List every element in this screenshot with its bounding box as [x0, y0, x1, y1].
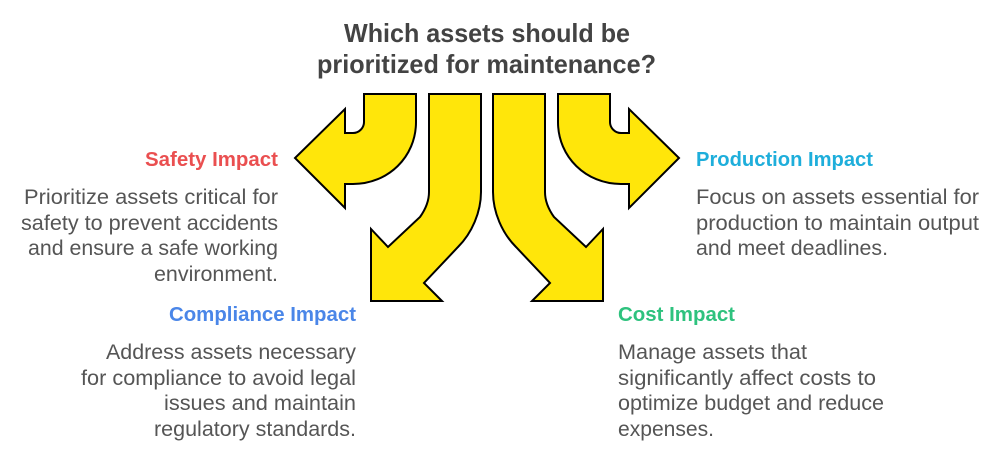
text: compliance description: Address assets necessary: [106, 341, 357, 364]
text: compliance description: [81, 341, 357, 441]
title: prioritized for maintenance?: [317, 49, 656, 79]
arrow: safety: [295, 94, 416, 208]
heading: cost impact: Cost Impact: [618, 304, 735, 326]
text: safety description: and ensure a safe working: [28, 237, 278, 260]
title: Which assets should be: [344, 18, 630, 48]
text: cost description: expenses.: [618, 418, 714, 441]
text: safety description: Prioritize assets critical for: [24, 186, 278, 209]
panel: production impact: [696, 149, 979, 260]
text: compliance description: for compliance to avoid legal: [81, 367, 356, 390]
panel: compliance impact: [81, 304, 357, 441]
text: production description: [696, 186, 979, 260]
arrow: cost: [493, 94, 603, 301]
text: cost description: [618, 341, 884, 441]
text: production description: Focus on assets essential for: [696, 186, 979, 209]
heading: compliance impact: Compliance Impact: [169, 304, 356, 326]
text: safety description: environment.: [154, 263, 278, 286]
arrow: production: [558, 94, 679, 208]
text: compliance description: issues and maintain: [164, 392, 356, 415]
text: cost description: significantly affect costs to: [618, 367, 876, 390]
heading: production impact: Production Impact: [696, 149, 873, 171]
text: safety description: [21, 186, 278, 286]
text: safety description: safety to prevent accidents: [21, 212, 278, 235]
title: [317, 18, 656, 79]
heading: safety impact: Safety Impact: [145, 149, 278, 171]
arrow: compliance: [371, 94, 481, 301]
text: cost description: optimize budget and reduce: [618, 392, 884, 415]
panel: cost impact: [618, 304, 884, 441]
text: production description: production to maintain output: [696, 212, 979, 235]
text: compliance description: regulatory standards.: [154, 418, 356, 441]
text: production description: and meet deadlines.: [696, 237, 888, 260]
panel: safety impact: [21, 149, 278, 286]
text: cost description: Manage assets that: [618, 341, 807, 364]
